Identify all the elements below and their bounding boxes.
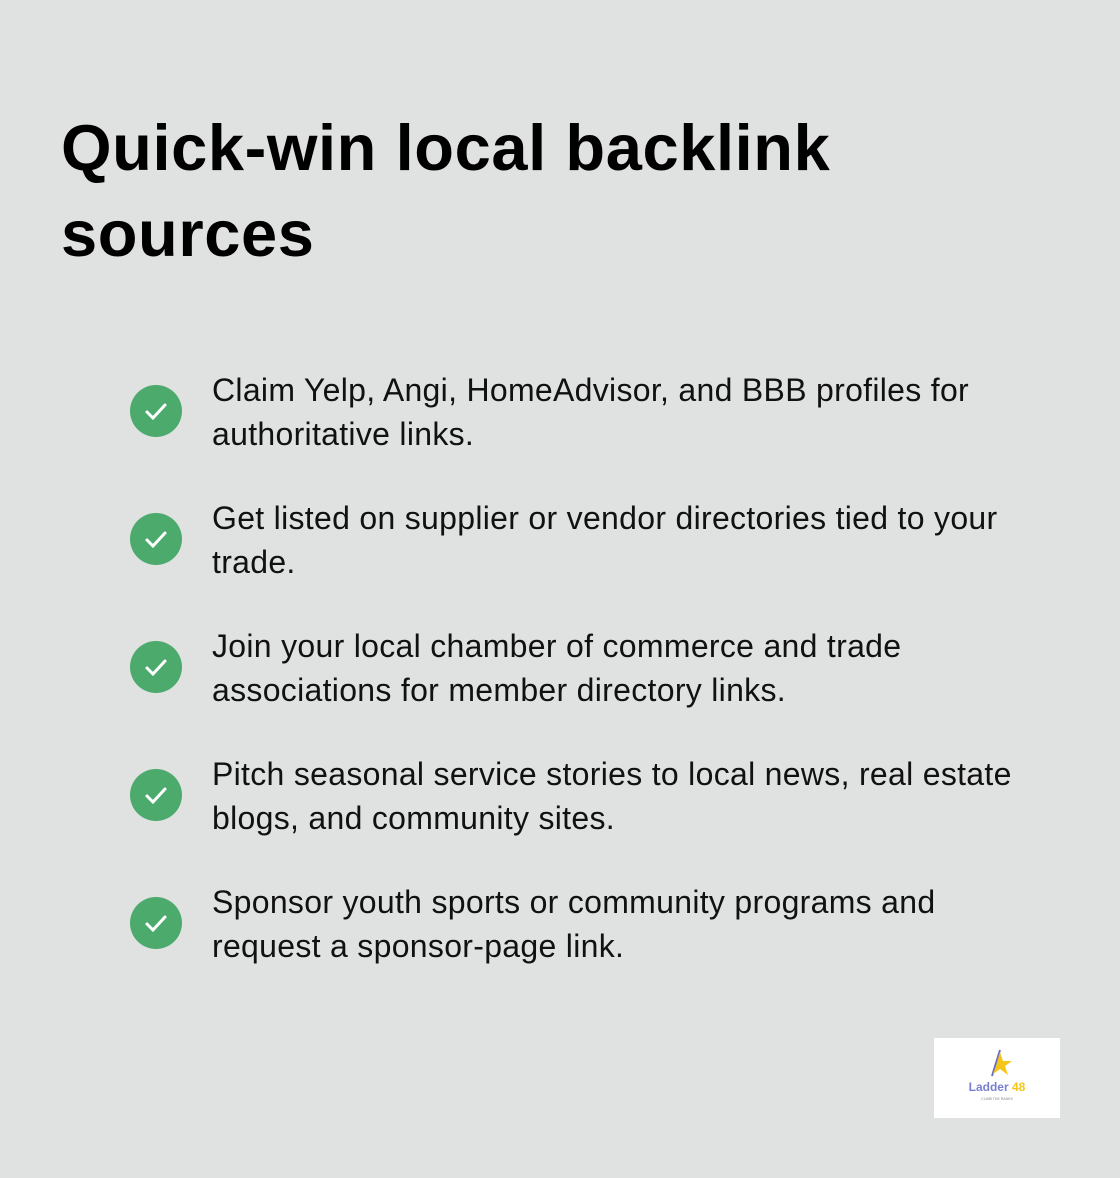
item 1 (130, 372, 969, 452)
icon: check (130, 769, 182, 821)
text: Sponsor youth sports or community programs and (212, 884, 935, 920)
text: Pitch seasonal service stories to local news, real estate (212, 756, 1012, 792)
icon: check (130, 897, 182, 949)
icon: check (130, 641, 182, 693)
text: Claim Yelp, Angi, HomeAdvisor, and BBB profiles for (212, 372, 969, 408)
title (61, 111, 830, 270)
item 2 (130, 500, 998, 580)
icon: check (130, 385, 182, 437)
text (212, 884, 935, 964)
text: associations for member directory links. (212, 672, 786, 708)
text: authoritative links. (212, 416, 474, 452)
logo: Ladder 48 (969, 1080, 1026, 1094)
text: Join your local chamber of commerce and trade (212, 628, 901, 664)
title: Quick-win local backlink (61, 111, 830, 184)
text (212, 500, 998, 580)
text: blogs, and community sites. (212, 800, 615, 836)
text: Get listed on supplier or vendor directories tied to your (212, 500, 998, 536)
text (212, 628, 901, 708)
logo (934, 1038, 1060, 1118)
item 4 (130, 756, 1012, 836)
item 5 (130, 884, 935, 964)
icon: check (130, 513, 182, 565)
title: sources (61, 197, 315, 270)
text (212, 372, 969, 452)
text: trade. (212, 544, 296, 580)
text (212, 756, 1012, 836)
text: request a sponsor-page link. (212, 928, 624, 964)
logo: CLIMB THE RANKS (981, 1097, 1013, 1101)
item 3 (130, 628, 901, 708)
